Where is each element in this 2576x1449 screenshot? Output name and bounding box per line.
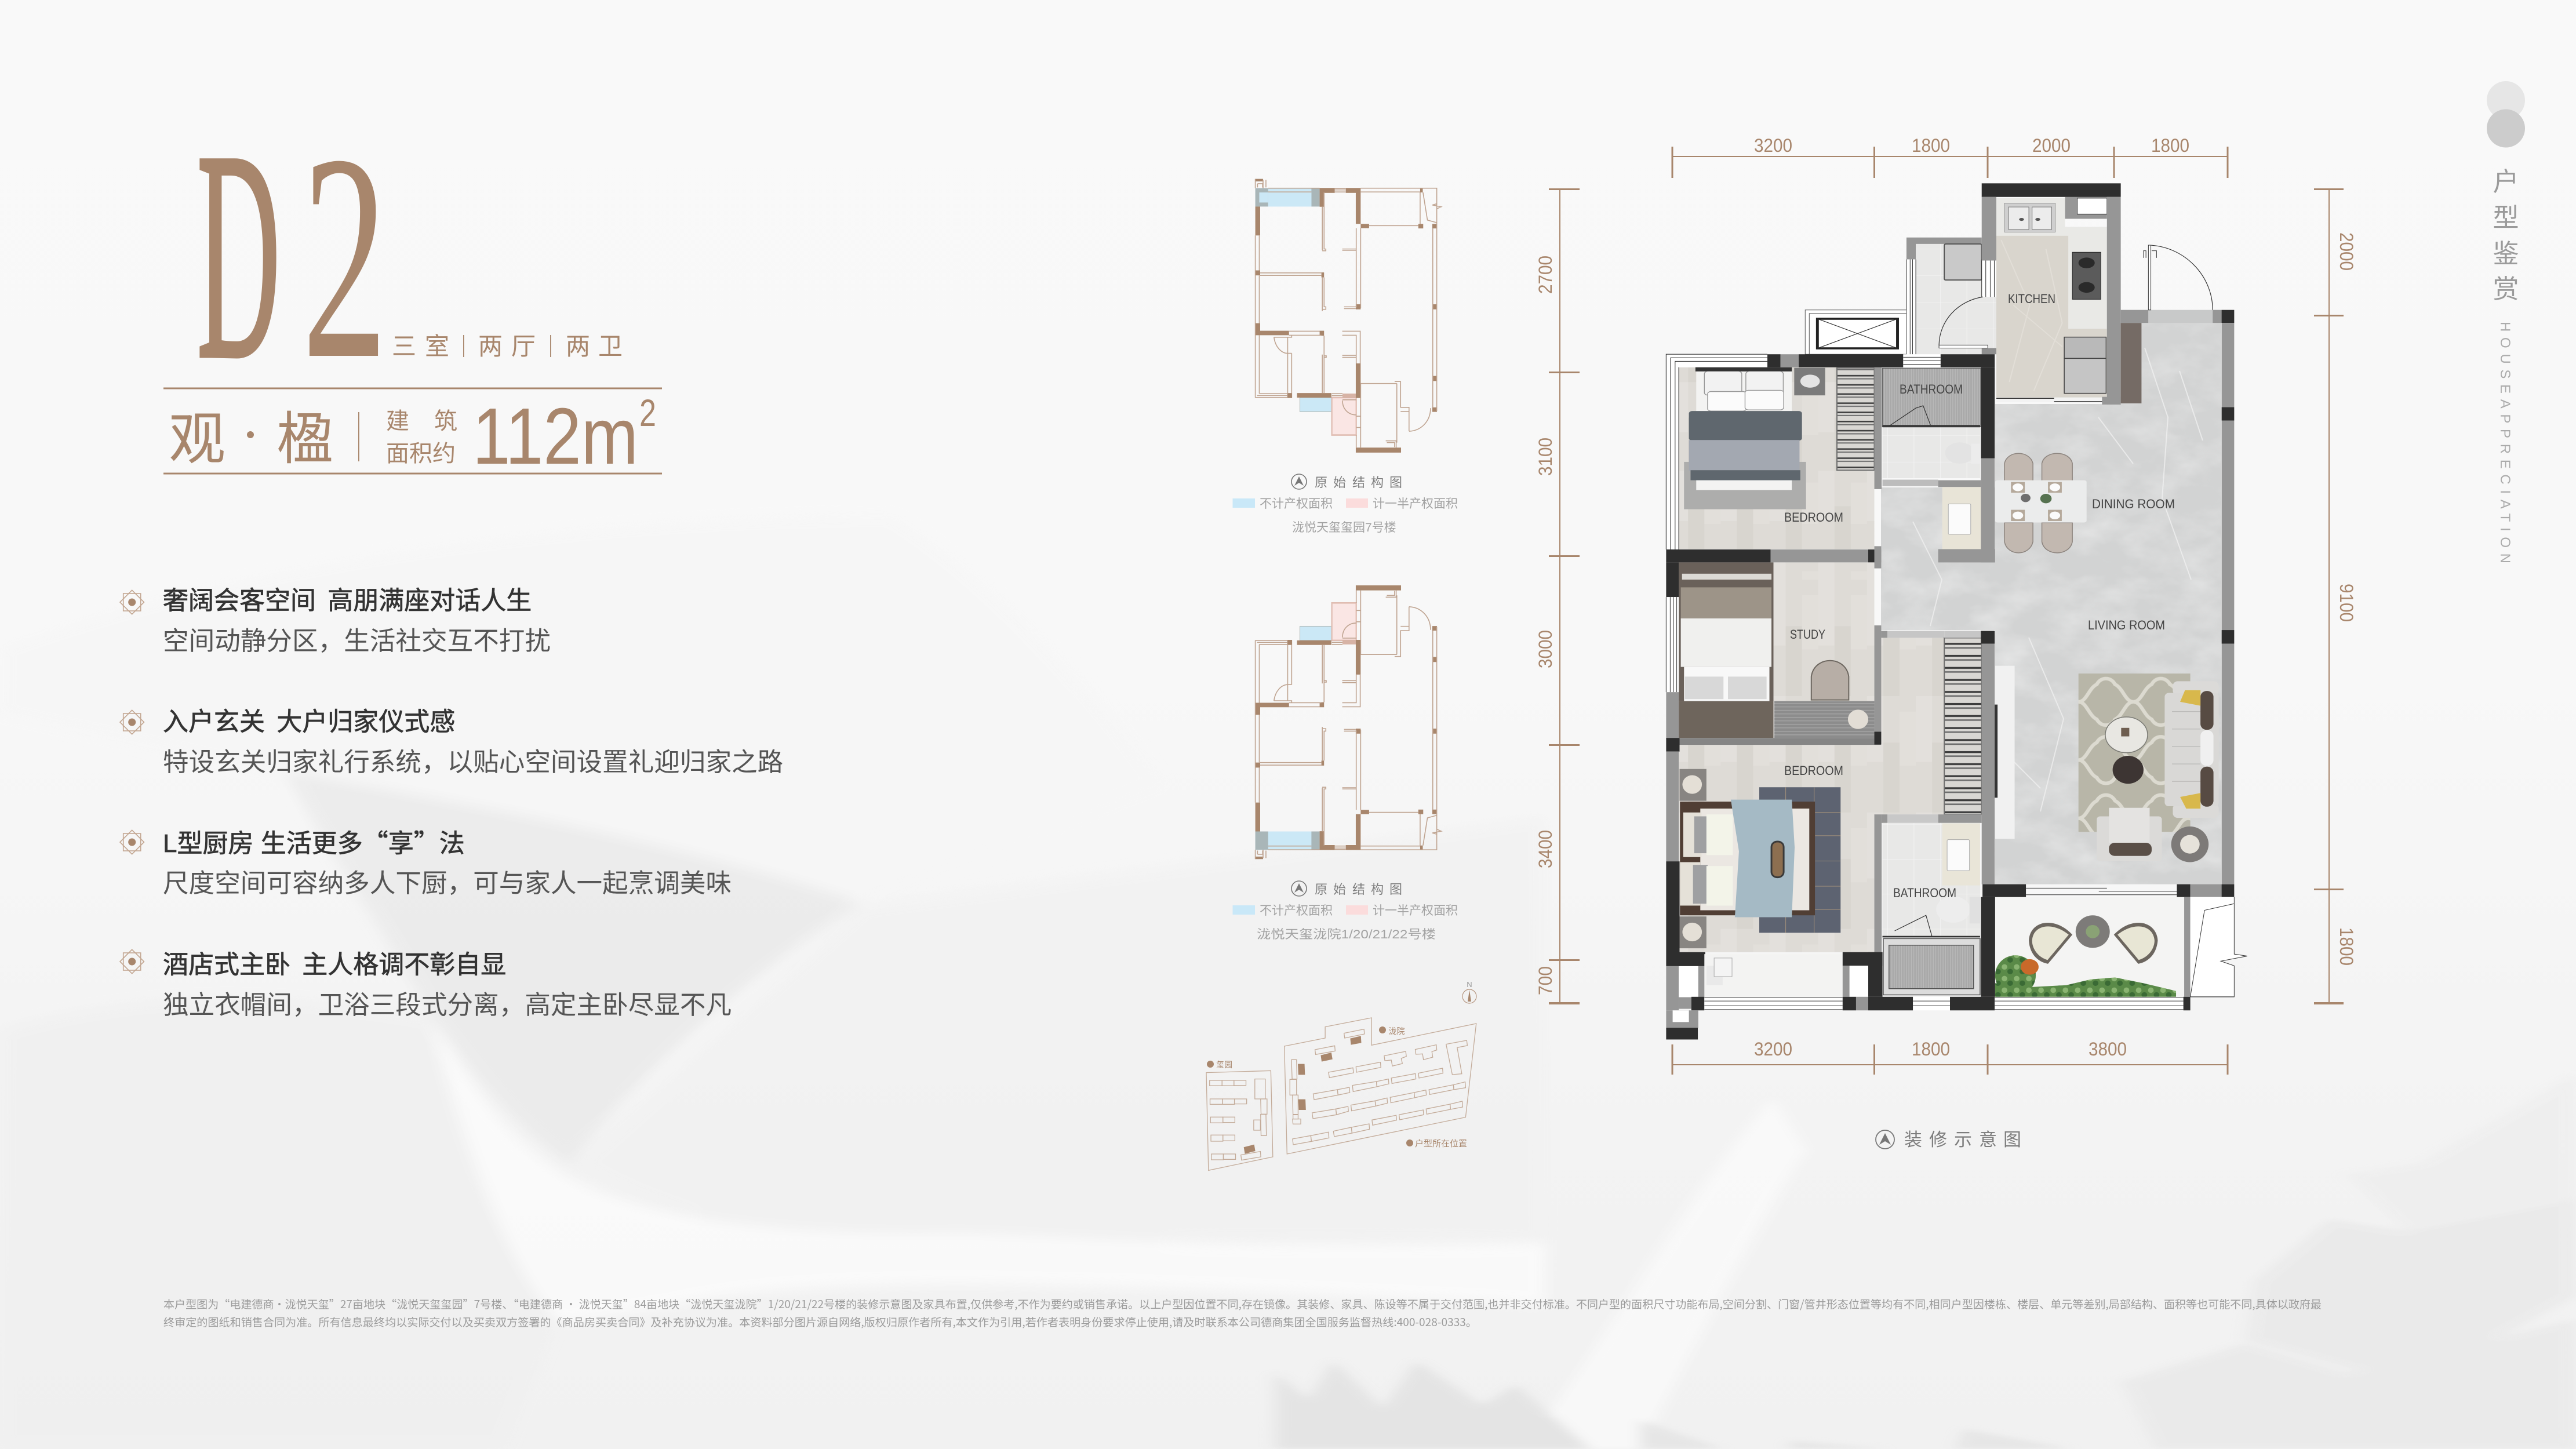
master bedroom bbox=[1679, 631, 1982, 952]
feature 2: 特设玄关归家礼行系统，以贴心空间设置礼迎归家之路 bbox=[163, 748, 783, 777]
top dimensions: 1800 bbox=[1912, 135, 1950, 156]
site plan: 户型所在位置 bbox=[1415, 1139, 1467, 1149]
side rail: section tab: 鉴 bbox=[2493, 239, 2519, 268]
room types: 三室 两厅 两卫: 三室两厅两卫 bbox=[392, 333, 623, 360]
top dimensions: 1800 bbox=[2151, 135, 2189, 156]
feature 3: L型厨房 生活更多“享”法 bbox=[163, 822, 465, 860]
name and area block bbox=[163, 387, 662, 481]
side rail: section tab: 户 bbox=[2493, 167, 2519, 196]
feature 1: 空间动静分区，生活社交互不打扰 bbox=[163, 627, 551, 656]
title: D2: D bbox=[197, 90, 280, 421]
name and area block: 2 bbox=[639, 391, 656, 434]
room labels: BEDROOM bbox=[1784, 510, 1843, 525]
title: D2 bbox=[197, 90, 387, 421]
bottom dimensions: 3800 bbox=[2089, 1039, 2127, 1060]
left dimensions: 3000 bbox=[1535, 630, 1556, 668]
garden balcony bbox=[1982, 884, 2247, 997]
bottom dimensions: 3200 bbox=[1754, 1039, 1792, 1060]
footer disclaimer: 本户型图为“电建德商·泷悦天玺”27亩地块“泷悦天玺玺园”7号楼、“电建德商 · 泷悦天玺”84亩地块“泷悦天玺泷院”1/20/21/22号楼的装修示意图及家具布置,仅供参考,不作为要约或销售承诺。以上户型因位置不同,存在镜像。其装修、家具、陈设等不属于交付范围,也并非交付标准。不同户型的面积尺寸功能布局,空间分割、门窗/管井形态位置等均有不同,相同户型因楼栋、楼层、单元等差别,局部结构、面积等也可能不同,具体以政府最 bbox=[163, 1296, 2322, 1312]
top dimensions bbox=[1672, 135, 2228, 178]
room labels: BEDROOM bbox=[1784, 763, 1843, 778]
name and area block: 建 bbox=[386, 409, 409, 434]
right dimensions: 9100 bbox=[2336, 584, 2357, 622]
feature 2: 入户玄关 大户归家仪式感 bbox=[163, 708, 455, 736]
shaft bbox=[1805, 310, 1906, 354]
room labels bbox=[1784, 292, 2175, 900]
room labels: STUDY bbox=[1790, 627, 1825, 642]
footer disclaimer: 终审定的图纸和销售合同为准。所有信息最终均以实际交付以及买卖双方签署的《商品房买卖合同》及补充协议为准。本资料部分图片源自网络,版权归原作者所有,本文作为引用,若作者表明身份要求停止使用,请及时联系本公司德商集团全国服务监督热线:400-028-0333。 bbox=[163, 1314, 1477, 1330]
right wall and window bbox=[1875, 580, 2234, 952]
room labels: LIVING ROOM bbox=[2088, 618, 2165, 632]
side rail: section tab: HOUSEAPPRECIATION bbox=[2497, 322, 2513, 563]
left dimensions: 700 bbox=[1535, 966, 1556, 995]
caption and legend: plan two: 原始结构图 bbox=[1315, 882, 1402, 897]
main furnished floor plan bbox=[1666, 183, 2247, 1039]
top dimensions: 2000 bbox=[2032, 135, 2071, 156]
caption and legend: plan one: 计一半产权面积 bbox=[1373, 497, 1458, 511]
room labels: BATHROOM bbox=[1893, 886, 1956, 900]
name and area block: 面积约 bbox=[386, 441, 456, 467]
bedroom bbox=[1666, 354, 1875, 549]
caption and legend: plan one bbox=[1232, 474, 1458, 534]
title: D2: 2 bbox=[302, 93, 387, 420]
name and area block: 112m bbox=[472, 392, 638, 481]
lower walls and window bay bbox=[1666, 580, 2234, 1039]
left dimensions: 2700 bbox=[1535, 256, 1556, 294]
feature 1: 奢阔会客空间 高朋满座对话人生 bbox=[163, 587, 532, 615]
bathroom one bbox=[1875, 367, 1981, 549]
caption and legend: plan two bbox=[1232, 881, 1458, 941]
left dimensions bbox=[1535, 188, 1580, 1004]
room labels: KITCHEN bbox=[2008, 292, 2055, 306]
room labels: DINING ROOM bbox=[2092, 497, 2175, 511]
study bbox=[1679, 580, 1887, 745]
bathroom two bbox=[1883, 823, 1980, 995]
caption and legend: plan one: 原始结构图 bbox=[1315, 475, 1402, 490]
feature 3 bbox=[120, 822, 732, 898]
side rail: section tab bbox=[2487, 81, 2525, 563]
side rail: section tab: 赏 bbox=[2493, 274, 2519, 304]
side rail: section tab: 型 bbox=[2493, 203, 2519, 232]
feature 4: 独立衣帽间，卫浴三段式分离，高定主卧尽显不凡 bbox=[163, 991, 732, 1020]
right dimensions: 1800 bbox=[2336, 927, 2357, 966]
feature 3: 尺度空间可容纳多人下厨，可与家人一起烹调美味 bbox=[163, 869, 732, 898]
name and area block: 观 bbox=[169, 407, 225, 471]
site plan: N bbox=[1467, 980, 1472, 989]
caption and legend: plan one: 泷悦天玺玺园7号楼 bbox=[1292, 521, 1396, 534]
site plan bbox=[1206, 980, 1476, 1170]
main plan caption: 装修示意图 bbox=[1904, 1130, 2021, 1150]
caption and legend: plan one: 不计产权面积 bbox=[1260, 497, 1333, 511]
footer disclaimer bbox=[163, 1296, 2322, 1330]
caption and legend: plan two: 计一半产权面积 bbox=[1373, 904, 1458, 918]
kitchen bbox=[1982, 183, 2121, 405]
lower plan: study, bedroom, bathroom, living, balcony bbox=[1666, 580, 2247, 1039]
bottom dimensions bbox=[1672, 1039, 2228, 1075]
dining table and chairs bbox=[1995, 453, 2087, 553]
feature 4 bbox=[120, 949, 732, 1020]
living room furniture bbox=[1994, 666, 2219, 862]
small structural plan: buildings 1/20/21/22 bbox=[1256, 585, 1441, 859]
left dimensions: 3100 bbox=[1535, 438, 1556, 476]
top dimensions: 3200 bbox=[1754, 135, 1792, 156]
feature 2 bbox=[120, 708, 783, 777]
living and dining marble floor bbox=[1881, 323, 2221, 884]
feature 4: 酒店式主卧 主人格调不彰自显 bbox=[163, 951, 506, 979]
structural walls bbox=[1666, 354, 1995, 580]
utility balcony bbox=[1906, 238, 1996, 354]
feature 1 bbox=[120, 587, 551, 656]
caption and legend: plan two: 不计产权面积 bbox=[1260, 904, 1333, 918]
entrance and right wall bbox=[2121, 245, 2234, 580]
bottom dimensions: 1800 bbox=[1912, 1039, 1950, 1060]
small structural plan: building 7 bbox=[1256, 179, 1441, 453]
site plan: 玺园 bbox=[1216, 1060, 1232, 1069]
right dimensions: 2000 bbox=[2336, 232, 2357, 271]
caption and legend: plan two: 泷悦天玺泷院1/20/21/22号楼 bbox=[1257, 928, 1436, 941]
room labels: BATHROOM bbox=[1900, 382, 1963, 396]
upper plan: bedroom, bathroom, kitchen, dining bbox=[1666, 183, 2234, 580]
feature list bbox=[120, 587, 783, 1020]
right dimensions bbox=[2314, 188, 2357, 1004]
left dimensions: 3400 bbox=[1535, 830, 1556, 868]
name and area block: 筑 bbox=[434, 409, 457, 434]
name and area block: 楹 bbox=[276, 407, 333, 471]
site plan: 泷院 bbox=[1389, 1026, 1405, 1036]
